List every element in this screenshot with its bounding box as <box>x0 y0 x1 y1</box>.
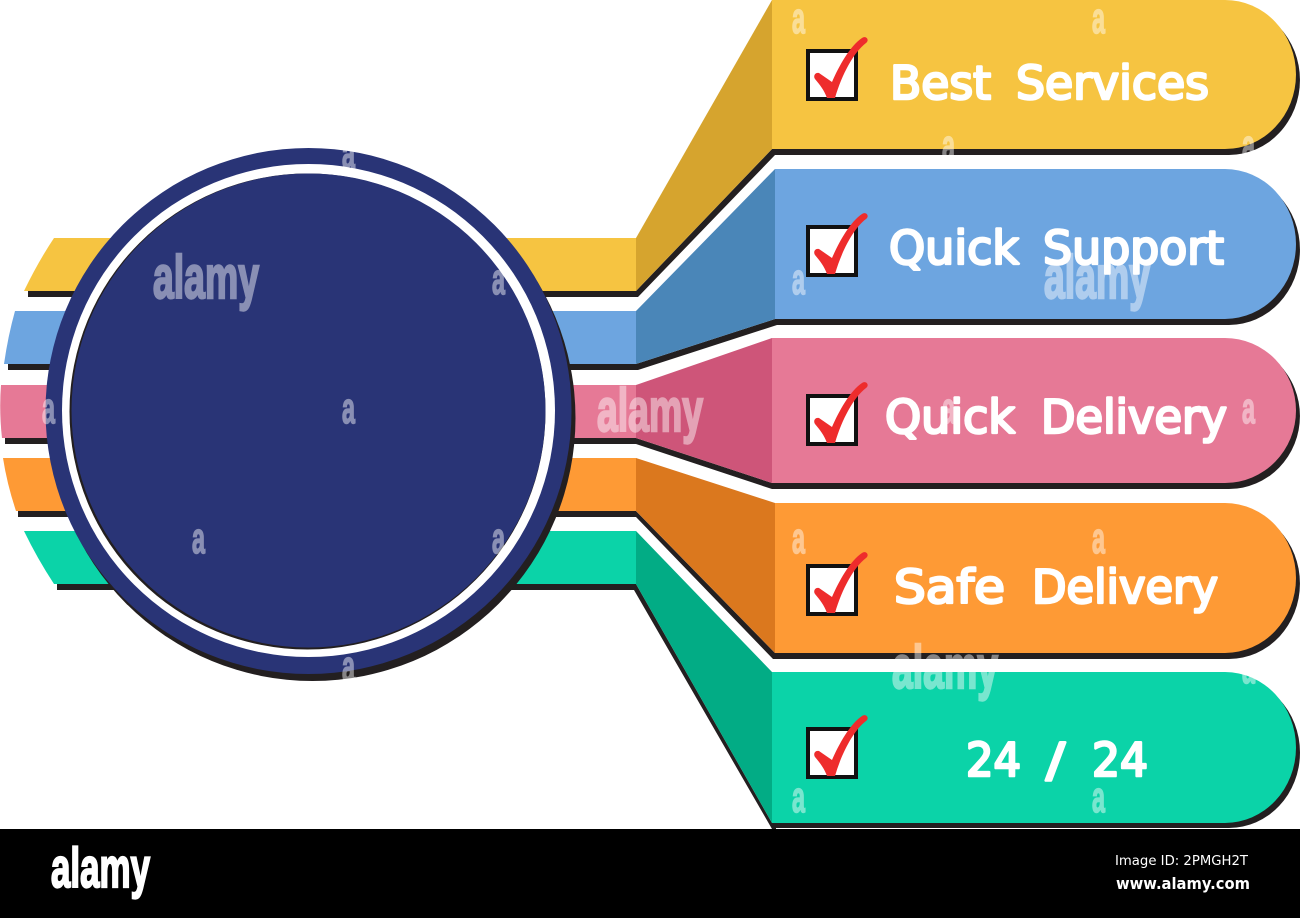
band: pink <box>0 385 636 438</box>
label: Safe Delivery <box>894 560 1218 614</box>
website: www.alamy.com <box>1116 874 1250 893</box>
icon: checkbox <box>808 37 868 99</box>
watermark pattern: alamy <box>597 377 703 444</box>
footer logo: alamy <box>51 836 150 899</box>
band shadow: yellow <box>28 149 776 297</box>
icon: checkbox <box>808 213 868 275</box>
connector: yellow <box>636 0 772 291</box>
watermark pattern: a <box>192 514 205 563</box>
row: Best Services <box>24 0 1300 297</box>
row: Quick Delivery <box>0 338 1300 489</box>
label: 24 / 24: 24 <box>966 733 1021 787</box>
watermark pattern: alamy <box>892 634 998 701</box>
watermark pattern: a <box>42 384 55 433</box>
watermark pattern: a <box>342 642 355 691</box>
label: Quick Support: Support <box>1043 221 1224 275</box>
watermark pattern: a <box>1242 384 1255 433</box>
image id: Image ID: 2PMGH2T <box>1115 853 1249 869</box>
band shadow: blue <box>8 319 779 370</box>
watermark pattern: a <box>492 255 505 304</box>
row: Safe Delivery <box>3 458 1300 659</box>
connector: blue <box>636 169 775 364</box>
label: Best Services: Services <box>1016 56 1209 110</box>
band: blue <box>4 311 636 364</box>
band shadow: pink <box>5 438 776 489</box>
panel: pink <box>772 338 1296 483</box>
label: Quick Delivery: Delivery <box>1041 390 1227 444</box>
watermark pattern: a <box>792 255 805 304</box>
watermark pattern: a <box>492 514 505 563</box>
watermark pattern: a <box>1092 773 1105 822</box>
icon: checkbox <box>808 715 868 777</box>
panel shadow: pink <box>776 343 1300 489</box>
watermark pattern: a <box>1242 644 1255 693</box>
band: orange <box>3 458 636 511</box>
watermark pattern: a <box>792 773 805 822</box>
row: Quick Support <box>4 169 1300 370</box>
watermark pattern: a <box>1092 514 1105 563</box>
watermark pattern: a <box>342 384 355 433</box>
connector: orange <box>636 458 775 653</box>
panel: blue <box>775 169 1296 319</box>
panel shadow: orange <box>779 508 1300 659</box>
label: Best Services: Best <box>890 56 991 110</box>
icon: checkbox <box>808 552 868 614</box>
panel: orange <box>775 503 1296 653</box>
icon: checkbox <box>808 382 868 444</box>
band shadow: orange <box>18 511 779 659</box>
central circle <box>46 148 576 681</box>
label: Quick Support <box>889 221 1224 275</box>
watermark pattern: a <box>1242 121 1255 170</box>
label: Quick Delivery: Quick <box>885 390 1015 444</box>
label: Safe Delivery: Delivery <box>1032 560 1218 614</box>
watermark pattern: a <box>342 129 355 178</box>
label: Quick Support: Quick <box>889 221 1019 275</box>
watermark pattern: a <box>942 121 955 170</box>
panel: yellow <box>772 0 1296 149</box>
watermark pattern: a <box>792 514 805 563</box>
watermark pattern: a <box>942 384 955 433</box>
panel: green <box>772 672 1296 823</box>
label: Safe Delivery: Safe <box>894 560 1005 614</box>
band: green <box>24 531 636 584</box>
panel shadow: blue <box>779 174 1300 325</box>
watermark pattern: alamy <box>1044 244 1150 311</box>
label: 24 / 24: / <box>1046 733 1066 787</box>
label: Quick Delivery <box>885 390 1227 444</box>
label: Best Services <box>890 56 1209 110</box>
connector: green <box>636 531 772 823</box>
band: yellow <box>24 238 636 291</box>
footer bar <box>0 829 1300 918</box>
label: 24 / 24: 24 <box>1092 733 1148 787</box>
connector: pink <box>636 338 772 483</box>
label: 24 / 24 <box>966 733 1148 787</box>
row: 24 / 24 <box>24 531 1300 829</box>
watermark pattern: alamy <box>153 244 259 311</box>
panel shadow: green <box>776 677 1300 828</box>
panel shadow: yellow <box>776 5 1300 155</box>
band shadow: green <box>57 584 776 829</box>
